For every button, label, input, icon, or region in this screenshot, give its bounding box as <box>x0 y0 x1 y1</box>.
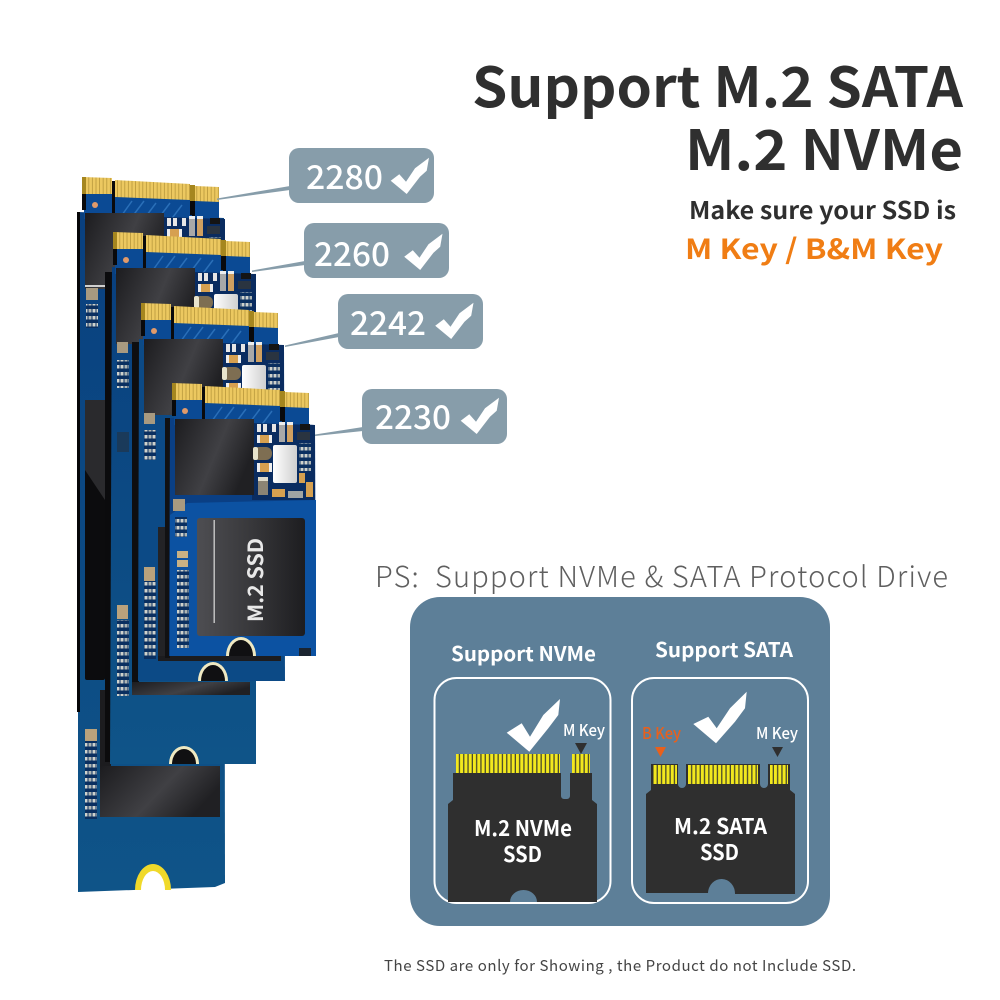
SSD title: M.2 NVMe <box>474 812 572 843</box>
SSD stack illustration <box>77 177 316 892</box>
heading: support SATA: Support SATA <box>655 634 793 663</box>
panel: SATA card <box>632 678 808 903</box>
SSD title: M.2 SATA <box>674 810 767 841</box>
badge: 2230: 2230 <box>375 391 451 439</box>
mounting notch <box>169 746 199 764</box>
title <box>472 43 964 186</box>
badge: 2280 <box>289 148 434 203</box>
icon: check <box>693 692 747 743</box>
SSD title <box>474 812 572 869</box>
heading: support NVMe: Support NVMe <box>451 638 596 667</box>
leader line: 2230 <box>315 427 363 436</box>
icon: check <box>404 234 442 270</box>
SSD shape: SATA <box>646 764 795 894</box>
panel: NVMe card <box>434 678 610 903</box>
title: Support M.2 SATA <box>472 43 964 123</box>
B Key label: B Key <box>642 720 681 744</box>
SSD title <box>674 810 767 867</box>
badge: 2280: 2280 <box>306 151 383 199</box>
badge: 2230 <box>362 389 507 444</box>
card: 2230 <box>165 383 316 658</box>
M Key label: M Key <box>563 717 605 741</box>
protocol note: PS: Support NVMe & SATA Protocol Drive <box>375 554 948 596</box>
title: M.2 NVMe <box>685 106 963 186</box>
gold pads <box>653 765 788 784</box>
mounting notch: yellow <box>135 864 171 890</box>
M Key label: M Key <box>756 720 798 744</box>
badge: 2242 <box>338 294 483 349</box>
SSD shape: NVMe <box>448 773 597 902</box>
panel: protocol support <box>410 597 830 926</box>
icon: check <box>391 158 429 194</box>
badge: 2260: 2260 <box>314 228 390 276</box>
mounting notch <box>226 637 256 656</box>
key type highlight: M Key / B&M Key <box>685 228 943 268</box>
subtitle: make sure your SSD is: Make sure your SSD is <box>689 191 956 226</box>
M key marker <box>772 747 783 757</box>
badge: 2260 <box>304 223 449 278</box>
label: M.2 SSD sticker: M.2 SSD <box>240 538 270 622</box>
leader line: 2260 <box>252 261 305 272</box>
key marker <box>575 743 587 754</box>
icon: check <box>507 699 560 752</box>
gold pads <box>456 754 590 773</box>
card: 2242 <box>132 303 285 682</box>
card: 2260 <box>105 232 256 764</box>
B key marker <box>655 747 666 757</box>
icon: check <box>435 303 474 339</box>
label: M.2 SSD sticker <box>197 518 305 636</box>
icon: check <box>461 398 499 434</box>
mounting notch <box>198 662 228 681</box>
SSD title: SSD <box>503 838 542 869</box>
leader line: 2280 <box>217 186 290 200</box>
footnote: The SSD are only for Showing , the Product do not Include SSD. <box>384 955 856 976</box>
card: 2280 <box>77 177 225 892</box>
SSD title: SSD <box>700 836 739 867</box>
badge: 2242: 2242 <box>350 297 426 345</box>
leader line: 2242 <box>285 333 339 347</box>
